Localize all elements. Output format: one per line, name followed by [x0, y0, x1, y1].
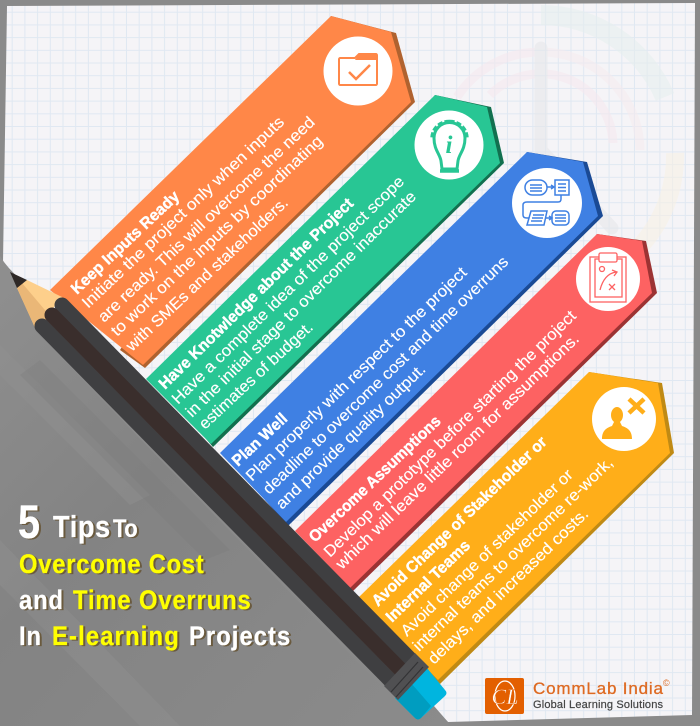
title: Tips — [53, 510, 110, 544]
title: E-learning — [52, 622, 179, 651]
heading and body text: avoid change — [369, 434, 617, 668]
heading and body text: plan well: Plan Well — [229, 410, 291, 470]
heading and body text: have knowledge: Have a complete idea of the project scope — [169, 173, 408, 408]
icon: light bulb with gear and letter i: i — [446, 132, 453, 159]
heading and body text: avoid change: Avoid Change of Stakeholder or — [369, 434, 551, 610]
heading and body text: avoid change: internal teams to overcome re-work, — [410, 454, 617, 655]
heading and body text: keep inputs ready: are ready. This will overcome the need — [95, 114, 319, 326]
title: 5 — [18, 497, 40, 549]
panel: avoid change of stakeholder — [358, 372, 674, 684]
pencil wood tip — [17, 280, 62, 330]
heading and body text: avoid change: delays, and increased costs. — [425, 506, 592, 668]
heading and body text: have knowledge: in the initial stage to overcome inaccurate — [183, 188, 420, 421]
panel: have knowledge about the project — [146, 95, 504, 447]
title: In — [19, 622, 41, 651]
heading and body text: keep inputs ready — [68, 114, 326, 356]
watermark: faint clock rings — [457, 15, 675, 290]
icon: folder with check mark — [324, 36, 392, 106]
logo copyright mark: © — [663, 678, 670, 688]
title: Projects — [189, 622, 290, 651]
title — [18, 497, 290, 651]
heading and body text: overcome assumptions: which will leave little room for assumptions. — [332, 331, 583, 574]
heading and body text: plan well: and provide quality output. — [273, 361, 429, 513]
icon: light bulb with gear and letter i — [414, 110, 484, 180]
title: To — [113, 515, 138, 542]
logo wordmark: CommLab India — [533, 679, 664, 698]
logo mark: CL — [492, 684, 518, 709]
heading and body text: keep inputs ready: with SMEs and stakeholders. — [122, 194, 292, 356]
heading and body text: plan well: Plan properly with respect to the project — [243, 264, 471, 485]
title: Time Overruns — [73, 586, 251, 615]
heading and body text: avoid change: Avoid change of stakeholder or — [398, 466, 577, 640]
pencil body stripes — [42, 305, 410, 680]
logo: CommLab India — [485, 678, 670, 714]
grey desk area with title background — [0, 256, 448, 726]
heading and body text: keep inputs ready: to work on the inputs by coordinating — [108, 133, 326, 340]
pencil eraser — [395, 668, 446, 720]
heading and body text: keep inputs ready: Initiate the project only when inputs — [79, 114, 288, 312]
title: Overcome Cost — [19, 550, 204, 579]
heading and body text: avoid change: Internal Teams — [383, 537, 474, 626]
panel: plan well — [220, 152, 603, 526]
icon: process flowchart — [512, 168, 582, 238]
panel: overcome assumptions — [295, 234, 657, 592]
heading and body text: have knowledge: Have Knotwledge about the Project — [156, 195, 358, 393]
icon: person with cross — [592, 387, 656, 451]
heading and body text: overcome assumptions: Develop a prototype before starting the project — [321, 307, 580, 561]
logo tagline: Global Learning Solutions — [533, 699, 664, 711]
pencil graphite point — [10, 272, 27, 288]
pencil ferrule — [384, 653, 429, 700]
heading and body text: have knowledge: estimates of budget. — [196, 319, 317, 433]
pencil — [10, 272, 446, 720]
logo mark — [485, 678, 524, 714]
heading and body text: overcome assumptions: Overcome Assumptions — [306, 413, 445, 546]
heading and body text: keep inputs ready: Keep Inputs Ready — [68, 188, 183, 298]
panel: keep inputs ready — [50, 16, 415, 368]
heading and body text: plan well: deadline to overcome cost and time overruns — [260, 254, 512, 498]
icon: clipboard with game plan — [576, 247, 640, 311]
title: and — [19, 586, 63, 615]
